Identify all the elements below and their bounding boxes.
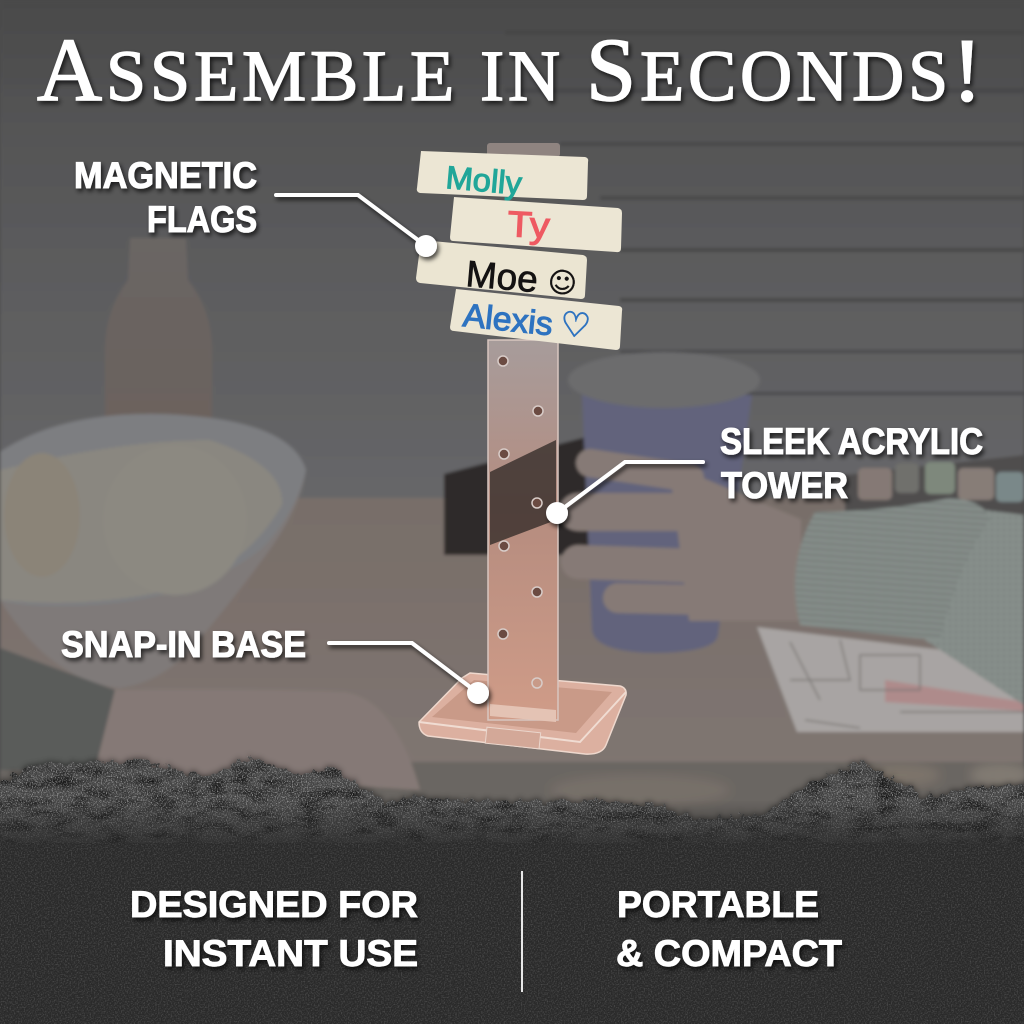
child's hand and sleeve at left (0, 648, 115, 770)
callout: magnetic flags: FLAGS (147, 199, 257, 240)
footer text: designed for instant use (130, 884, 418, 974)
sweater sleeve (795, 498, 1024, 705)
callout: sleek acrylic tower (546, 421, 983, 524)
base (419, 673, 626, 754)
tower (488, 340, 558, 720)
footer text: portable and compact: PORTABLE (617, 884, 819, 925)
cup (582, 395, 752, 653)
flag: Molly: Molly (444, 159, 523, 202)
flag: Alexis: Alexis (461, 296, 555, 342)
callout: magnetic flags: MAGNETIC (74, 155, 257, 196)
callout: magnetic flags (74, 155, 437, 257)
product: acrylic tower with flags (416, 143, 626, 754)
pastel game tiles (845, 455, 1024, 515)
window blinds (505, 30, 1024, 395)
flag: Moe: ☺ (546, 265, 578, 301)
footer text: designed for instant use: DESIGNED FOR (130, 884, 418, 925)
flag: Moe: Moe (464, 253, 540, 300)
flag: Ty (450, 197, 622, 252)
reflection in tower (490, 440, 556, 545)
flag: Ty: Ty (507, 203, 551, 246)
footer text: designed for instant use: INSTANT USE (163, 933, 418, 974)
callout: snap-in base (61, 624, 489, 704)
callout: sleek acrylic tower: SLEEK ACRYLIC (720, 421, 983, 462)
flag: Molly (417, 151, 588, 202)
footer text: portable and compact: & COMPACT (616, 933, 842, 974)
footer divider (521, 871, 523, 992)
tower holes (498, 356, 543, 688)
snack bowl (0, 414, 306, 688)
callout: snap-in base: SNAP-IN BASE (61, 624, 306, 665)
flag: Alexis (450, 289, 622, 350)
bottle (105, 238, 212, 418)
dark game box (444, 436, 590, 555)
flag: Moe (416, 240, 587, 301)
footer text: portable and compact (616, 884, 842, 974)
callout: sleek acrylic tower: TOWER (721, 465, 848, 506)
hand (578, 463, 800, 620)
flag: Alexis: ♡ (558, 304, 593, 347)
title: ASSEMBLE IN SECONDS! (37, 21, 986, 120)
top tab (487, 143, 560, 157)
paper sheet (757, 627, 1024, 732)
torn dark footer panel (0, 757, 1024, 1024)
